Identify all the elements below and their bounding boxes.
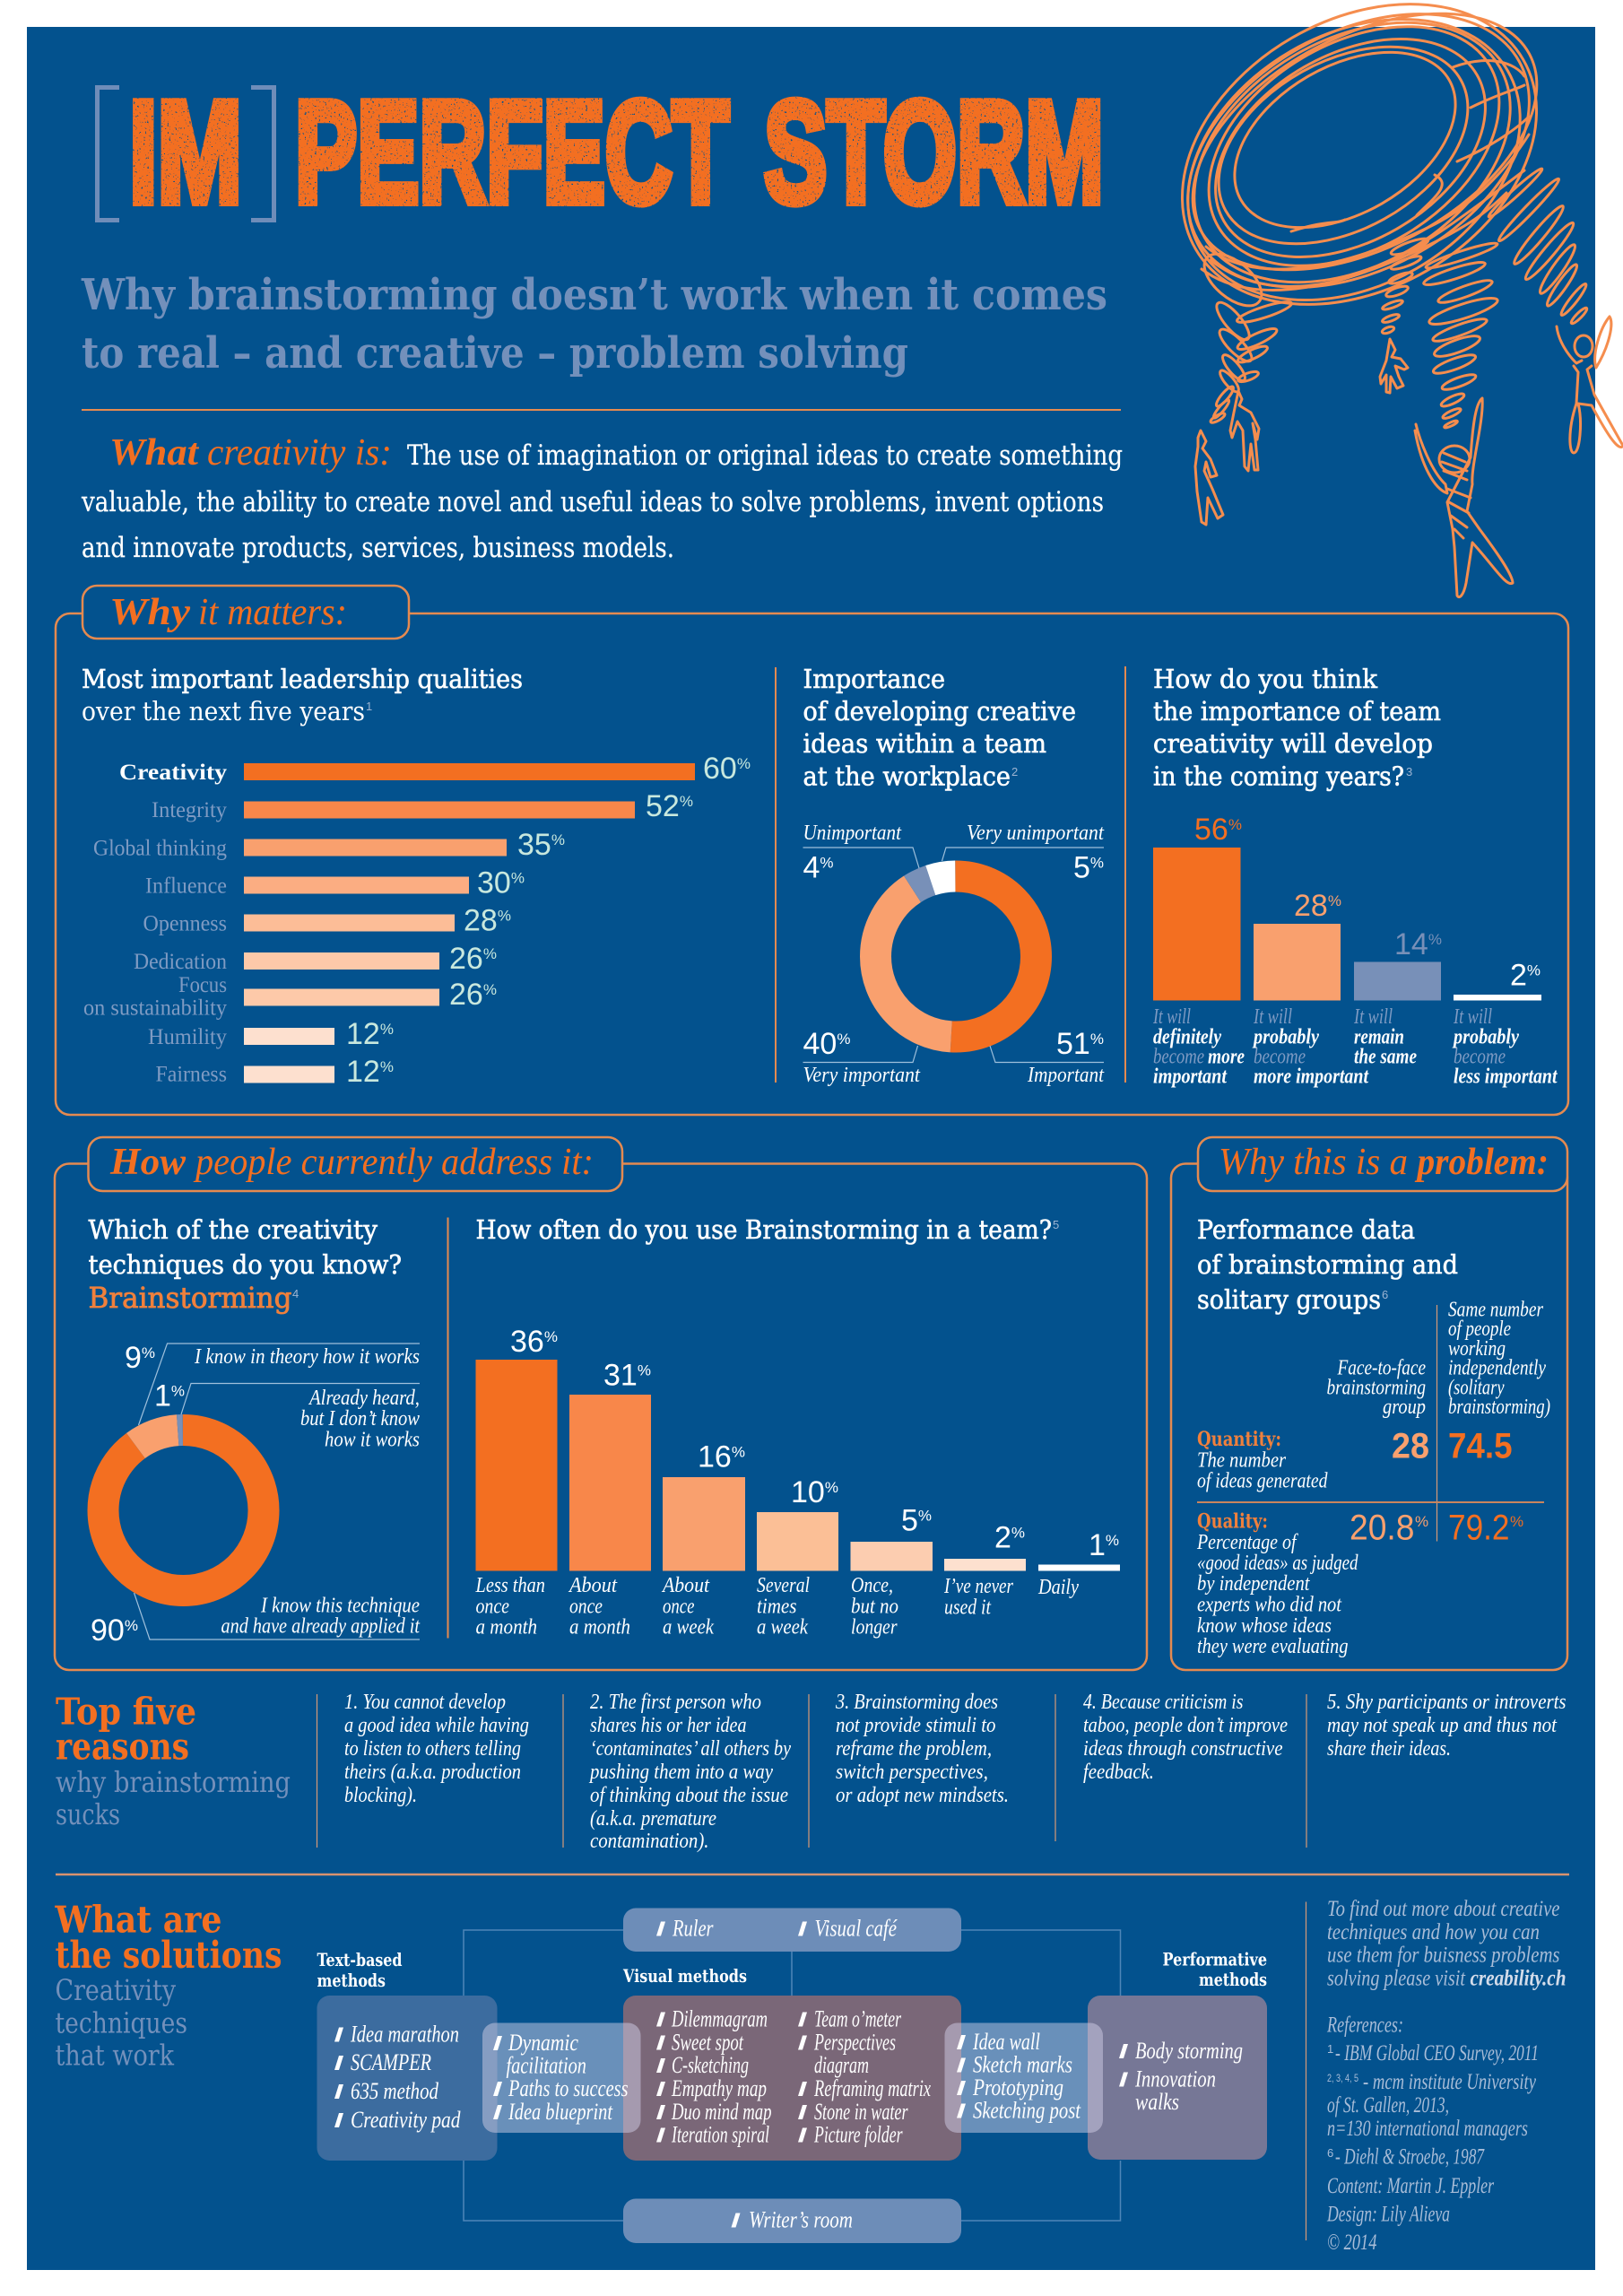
reason 5: share their ideas. bbox=[1327, 1737, 1451, 1761]
text block: more info and references: - mcm institute University bbox=[1363, 2070, 1537, 2094]
box: text-based methods: 635 method bbox=[351, 2078, 439, 2104]
bar chart: leadership qualities: Dedication bbox=[134, 950, 227, 974]
bar chart: leadership qualities: 12 bbox=[346, 1017, 380, 1051]
text block: more info and references: 6 bbox=[1327, 2146, 1333, 2160]
reason 2: contamination). bbox=[590, 1830, 708, 1853]
panel heading: why it matters: Why bbox=[109, 592, 190, 633]
heading: what are the solutions: that work bbox=[56, 2038, 175, 2072]
bar chart: leadership qualities: % bbox=[380, 1058, 394, 1075]
bar chart: future importance: % bbox=[1428, 931, 1442, 948]
panel: why this is a problem bbox=[1171, 1137, 1567, 1670]
bar chart: leadership qualities: Creativity bbox=[119, 761, 228, 785]
bar chart: leadership qualities: 52 bbox=[646, 789, 680, 823]
bar chart: leadership qualities: % bbox=[737, 755, 751, 772]
bar chart: future importance: % bbox=[1527, 961, 1541, 979]
box: visual top: Visual café bbox=[814, 1916, 898, 1941]
donut chart: importance: % bbox=[1090, 854, 1104, 872]
donut chart: brainstorming knowledge: I know this technique bbox=[260, 1595, 420, 1618]
bar chart: future importance: It will bbox=[1152, 1005, 1191, 1029]
donut chart: brainstorming knowledge: and have already applied it bbox=[221, 1614, 421, 1638]
heading: leadership qualities: Most important leadership qualities bbox=[82, 664, 523, 694]
bar chart: future importance: % bbox=[1328, 892, 1341, 909]
bar chart: brainstorming frequency: % bbox=[1106, 1532, 1119, 1549]
bar chart: brainstorming frequency: times bbox=[757, 1595, 796, 1618]
box: text-based methods: SCAMPER bbox=[351, 2049, 431, 2075]
bar chart: future importance: more important bbox=[1254, 1065, 1369, 1089]
list: visual methods items: Stone in water bbox=[814, 2099, 908, 2125]
diagram: creativity methods bbox=[317, 1909, 1267, 2243]
bar chart: leadership qualities: 60 bbox=[703, 752, 737, 786]
donut chart: importance: 40 bbox=[803, 1027, 837, 1061]
bar chart: leadership qualities: Openness bbox=[143, 911, 227, 936]
donut chart: importance: 4 bbox=[803, 850, 820, 884]
bar chart: brainstorming frequency: 1 bbox=[1089, 1528, 1106, 1562]
donut chart: importance: Very important bbox=[803, 1064, 921, 1087]
bar chart: brainstorming frequency: 10 bbox=[791, 1475, 825, 1509]
heading: team creativity development: 3 bbox=[1406, 765, 1412, 778]
heading: known creativity techniques: 4 bbox=[292, 1287, 299, 1300]
reason 4: feedback. bbox=[1083, 1761, 1154, 1784]
bar chart: leadership qualities: 28 bbox=[464, 904, 498, 938]
text block: more info and references: 2, 3, 4, 5 bbox=[1327, 2072, 1358, 2084]
bar chart: brainstorming frequency: a week bbox=[757, 1616, 808, 1639]
table: performance data: % bbox=[1510, 1513, 1523, 1530]
bar chart: brainstorming frequency: % bbox=[1011, 1525, 1025, 1541]
text block: more info and references: Design: Lily Alieva bbox=[1326, 2203, 1450, 2226]
box: writer's room: Writer’s room bbox=[749, 2206, 853, 2233]
reason 2: of thinking about the issue bbox=[590, 1784, 788, 1807]
bar chart: leadership qualities: 26 bbox=[449, 942, 483, 976]
heading: known creativity techniques: Brainstorming bbox=[88, 1281, 292, 1315]
reason 3: reframe the problem, bbox=[836, 1737, 992, 1761]
title bbox=[97, 72, 1104, 233]
text block: more info and references: - IBM Global CEO Survey, 2011 bbox=[1335, 2041, 1539, 2066]
heading: importance of developing creative ideas bbox=[803, 664, 1076, 791]
box: text-visual overlap: Paths to success bbox=[508, 2075, 628, 2101]
subtitle: to real – and creative – problem solving bbox=[82, 328, 908, 378]
bar chart: leadership qualities: Global thinking bbox=[93, 836, 227, 861]
intro: what creativity is: The use of imagination or original ideas to create something bbox=[407, 439, 1123, 472]
heading: team creativity development: the importance of team bbox=[1153, 696, 1441, 726]
reason 1: a good idea while having bbox=[344, 1714, 529, 1737]
bar chart: leadership qualities: on sustainability bbox=[83, 996, 227, 1021]
bar chart: brainstorming frequency: a month bbox=[475, 1616, 537, 1639]
heading: leadership qualities bbox=[82, 664, 523, 726]
list: visual methods items: Empathy map bbox=[671, 2075, 767, 2101]
reasons dividers bbox=[317, 1694, 1306, 1848]
panel heading: why it matters: it matters: bbox=[198, 592, 347, 633]
reason 4 bbox=[1083, 1691, 1288, 1784]
bar chart: future importance: % bbox=[1228, 816, 1242, 833]
bar chart: brainstorming frequency: a week bbox=[663, 1616, 714, 1639]
heading: performance data: solitary groups bbox=[1197, 1284, 1381, 1315]
bar chart: future importance: more bbox=[1208, 1046, 1245, 1069]
bar chart: future importance: 56 bbox=[1194, 813, 1228, 847]
bar chart: brainstorming frequency: 2 bbox=[994, 1521, 1011, 1555]
list: visual methods items: C-sketching bbox=[672, 2052, 749, 2078]
donut chart: importance: % bbox=[820, 854, 834, 872]
list: visual methods items: Duo mind map bbox=[671, 2099, 771, 2125]
bar chart: leadership qualities: 26 bbox=[449, 978, 483, 1012]
table: performance data bbox=[1196, 1299, 1550, 1658]
donut chart: importance: 5 bbox=[1073, 850, 1090, 884]
table: performance data: 74.5 bbox=[1448, 1426, 1512, 1465]
bar chart: leadership qualities: 30 bbox=[477, 866, 511, 900]
table: performance data: group bbox=[1383, 1396, 1426, 1419]
bar chart: leadership qualities: % bbox=[483, 945, 497, 962]
bar chart: leadership qualities: Focus bbox=[178, 973, 227, 997]
reason 2: pushing them into a way bbox=[588, 1761, 773, 1784]
box: text-visual overlap: Idea blueprint bbox=[508, 2099, 613, 2125]
bar chart: leadership qualities: 12 bbox=[346, 1055, 380, 1089]
box: visual top: Ruler bbox=[672, 1916, 714, 1941]
table: performance data: of ideas generated bbox=[1197, 1469, 1328, 1492]
panel heading: why this is a problem: Why this is a bbox=[1219, 1142, 1408, 1183]
heading: team creativity development: How do you think bbox=[1153, 664, 1377, 694]
bar chart: future importance: probably bbox=[1452, 1026, 1519, 1049]
bar chart: future importance: the same bbox=[1354, 1046, 1417, 1069]
donut chart: brainstorming knowledge: but I don’t know bbox=[300, 1407, 420, 1431]
text block: more info and references: solving please visit bbox=[1327, 1966, 1466, 1991]
bar chart: future importance: definitely bbox=[1153, 1026, 1221, 1049]
bar chart: future importance: 2 bbox=[1510, 958, 1527, 992]
reason 2: (a.k.a. premature bbox=[590, 1807, 716, 1831]
bar chart: brainstorming frequency: About bbox=[568, 1574, 618, 1597]
list: visual methods items: Perspectives bbox=[813, 2029, 896, 2056]
heading: team creativity development: creativity will develop bbox=[1153, 728, 1433, 759]
list: visual methods items: Dilemmagram bbox=[671, 2005, 768, 2032]
table: performance data: brainstorming bbox=[1327, 1376, 1426, 1399]
box: performative methods: Performative bbox=[1162, 1948, 1267, 1970]
heading: known creativity techniques bbox=[88, 1214, 402, 1315]
donut chart: importance: Unimportant bbox=[803, 822, 902, 845]
reason 4: taboo, people don’t improve bbox=[1083, 1714, 1288, 1737]
box: text-visual overlap: facilitation bbox=[506, 2052, 586, 2079]
table: performance data: they were evaluating bbox=[1197, 1635, 1349, 1658]
heading: top five reasons: why brainstorming bbox=[56, 1765, 291, 1799]
heading: team creativity development: in the coming years? bbox=[1153, 761, 1404, 791]
bar chart: brainstorming frequency bbox=[475, 1325, 1120, 1639]
icon: tornado scribble with people bbox=[1128, 0, 1623, 597]
donut chart: importance: 51 bbox=[1056, 1027, 1090, 1061]
bar chart: future importance: become bbox=[1153, 1046, 1204, 1069]
table: performance data: brainstorming) bbox=[1448, 1396, 1550, 1419]
heading: brainstorming frequency: How often do you use Brainstorming in a team? bbox=[475, 1214, 1052, 1245]
table: performance data: working bbox=[1448, 1337, 1506, 1361]
donut chart: brainstorming knowledge: I know in theory how it works bbox=[194, 1345, 420, 1369]
text block: more info and references: © 2014 bbox=[1327, 2231, 1377, 2255]
heading: performance data: of brainstorming and bbox=[1197, 1249, 1458, 1280]
heading: top five reasons: Top five bbox=[56, 1690, 196, 1733]
heading: brainstorming frequency: 5 bbox=[1053, 1218, 1059, 1231]
reason 4: ideas through constructive bbox=[1083, 1737, 1283, 1761]
bar chart: future importance: probably bbox=[1252, 1026, 1319, 1049]
reason 3 bbox=[835, 1691, 1009, 1807]
bar chart: leadership qualities: Influence bbox=[145, 874, 227, 899]
reason 3: or adopt new mindsets. bbox=[836, 1784, 1009, 1807]
donut chart: brainstorming knowledge bbox=[91, 1341, 421, 1648]
heading: top five reasons: reasons bbox=[56, 1726, 189, 1769]
table: performance data: Quality: bbox=[1197, 1510, 1268, 1534]
text block: more info and references: techniques and how you can bbox=[1327, 1920, 1540, 1944]
heading: known creativity techniques: Which of the creativity bbox=[88, 1214, 378, 1245]
donut chart: importance: % bbox=[837, 1031, 850, 1048]
bar chart: brainstorming frequency: 36 bbox=[510, 1325, 544, 1359]
text block: more info and references: creability.ch bbox=[1471, 1966, 1566, 1991]
box: text-based methods bbox=[317, 1949, 497, 2161]
heading: importance of developing creative ideas: 2 bbox=[1011, 765, 1018, 778]
box: text-visual overlap bbox=[482, 2023, 640, 2133]
panel heading: how people currently address it: people currently address it: bbox=[193, 1142, 594, 1183]
text block: more info and references: n=130 international managers bbox=[1327, 2117, 1528, 2141]
table: performance data: The number bbox=[1197, 1449, 1287, 1473]
reason 3: not provide stimuli to bbox=[836, 1714, 995, 1737]
heading: importance of developing creative ideas: at the workplace bbox=[803, 761, 1011, 791]
bar chart: future importance: important bbox=[1153, 1065, 1228, 1089]
heading: performance data: 6 bbox=[1382, 1288, 1388, 1301]
intro: what creativity is bbox=[81, 432, 1123, 564]
bar chart: brainstorming frequency: longer bbox=[851, 1616, 898, 1639]
bar chart: future importance: become bbox=[1254, 1046, 1306, 1069]
donut chart: brainstorming knowledge: 90 bbox=[91, 1613, 125, 1648]
reason 2: ‘contaminates’ all others by bbox=[590, 1737, 791, 1761]
subtitle: Why brainstorming doesn’t work when it comes bbox=[81, 270, 1107, 320]
bar chart: future importance: It will bbox=[1453, 1005, 1492, 1029]
reason 1: blocking). bbox=[344, 1784, 417, 1807]
heading: importance of developing creative ideas: of developing creative bbox=[803, 696, 1076, 726]
table: performance data: know whose ideas bbox=[1197, 1614, 1332, 1638]
panel heading: why this is a problem: problem: bbox=[1415, 1142, 1549, 1183]
bar chart: leadership qualities: Humility bbox=[148, 1025, 227, 1049]
bar chart: future importance: remain bbox=[1354, 1026, 1404, 1049]
box: writer's room bbox=[623, 2199, 961, 2243]
box: visual methods bbox=[622, 1965, 961, 2161]
reason 5 bbox=[1327, 1691, 1566, 1761]
bar chart: brainstorming frequency: % bbox=[918, 1507, 932, 1525]
reason 1: to listen to others telling bbox=[344, 1737, 521, 1761]
bar chart: leadership qualities: Integrity bbox=[152, 798, 227, 822]
bar chart: future importance: 14 bbox=[1394, 927, 1428, 961]
text block: more info and references: Content: Martin J. Eppler bbox=[1327, 2174, 1494, 2198]
bar chart: brainstorming frequency: % bbox=[732, 1444, 745, 1460]
table: performance data: Quantity: bbox=[1197, 1428, 1281, 1451]
reason 2 bbox=[588, 1691, 791, 1853]
list: visual methods items: Sweet spot bbox=[672, 2029, 744, 2056]
table: performance data: independently bbox=[1448, 1356, 1546, 1379]
text block: more info and references: References: bbox=[1326, 2013, 1403, 2038]
title: IM bbox=[129, 72, 242, 233]
bar chart: brainstorming frequency: I’ve never bbox=[943, 1575, 1014, 1598]
heading: what are the solutions: techniques bbox=[56, 2005, 187, 2039]
reason 5: may not speak up and thus not bbox=[1327, 1714, 1558, 1737]
title: STORM bbox=[764, 72, 1104, 233]
donut chart: brainstorming knowledge: Already heard, bbox=[308, 1387, 420, 1410]
box: performative methods: Body storming bbox=[1135, 2038, 1243, 2064]
intro: what creativity is: creativity is: bbox=[207, 432, 392, 474]
bar chart: brainstorming frequency: once bbox=[663, 1595, 695, 1618]
list: visual methods items bbox=[656, 2005, 931, 2147]
text block: more info and references: of St. Gallen, 2013, bbox=[1327, 2093, 1449, 2118]
donut chart: importance: % bbox=[1090, 1031, 1104, 1048]
text block: more info and references: use them for buisness problems bbox=[1327, 1943, 1560, 1968]
text block: more info and references: To find out more about creative bbox=[1327, 1897, 1560, 1921]
table: performance data: by independent bbox=[1197, 1572, 1311, 1596]
heading: leadership qualities: over the next five years bbox=[82, 696, 365, 726]
table: performance data: 28 bbox=[1392, 1426, 1429, 1465]
donut chart: importance: Important bbox=[1027, 1064, 1105, 1087]
box: text-based methods: methods bbox=[317, 1970, 386, 1991]
table: performance data: of people bbox=[1448, 1318, 1511, 1341]
bar chart: brainstorming frequency: once bbox=[569, 1595, 603, 1618]
intro: what creativity is: valuable, the ability to create novel and useful ideas to solve problems, invent options bbox=[81, 486, 1104, 518]
bar chart: leadership qualities: % bbox=[380, 1021, 394, 1038]
bar chart: future importance: become bbox=[1454, 1046, 1506, 1069]
bar chart: brainstorming frequency: % bbox=[825, 1479, 838, 1496]
bar chart: brainstorming frequency: but no bbox=[851, 1595, 898, 1618]
list: visual methods items: diagram bbox=[814, 2052, 869, 2078]
bar chart: brainstorming frequency: Less than bbox=[475, 1574, 545, 1597]
box: performative methods: methods bbox=[1199, 1969, 1267, 1990]
table: performance data: 79.2 bbox=[1448, 1509, 1510, 1548]
donut chart: brainstorming knowledge: % bbox=[171, 1383, 185, 1399]
list: visual methods items: Reframing matrix bbox=[813, 2075, 931, 2101]
bar chart: future importance: It will bbox=[1353, 1005, 1393, 1029]
list: visual methods items: Iteration spiral bbox=[671, 2122, 769, 2147]
text block: more info and references bbox=[1326, 1897, 1566, 2255]
bar chart: leadership qualities: % bbox=[551, 831, 565, 848]
reason 5: 5. Shy participants or introverts bbox=[1327, 1691, 1566, 1714]
box: visual-performative overlap bbox=[945, 2023, 1103, 2133]
bar chart: brainstorming frequency: Daily bbox=[1037, 1576, 1079, 1599]
heading: top five reasons: sucks bbox=[56, 1797, 120, 1831]
box: performative methods: walks bbox=[1135, 2089, 1179, 2115]
bar chart: leadership qualities: % bbox=[498, 908, 511, 924]
bar chart: brainstorming frequency: 5 bbox=[901, 1503, 918, 1537]
box: performative methods bbox=[1088, 1948, 1267, 2160]
heading: what are the solutions: What are bbox=[55, 1898, 221, 1941]
table: performance data: experts who did not bbox=[1197, 1593, 1342, 1616]
heading: what are the solutions bbox=[55, 1898, 282, 2072]
heading: what are the solutions: the solutions bbox=[56, 1934, 282, 1977]
list: visual methods items: Team o’meter bbox=[814, 2005, 902, 2032]
box: text-based methods: Idea marathon bbox=[350, 2022, 459, 2047]
text block: more info and references: - Diehl & Stroebe, 1987 bbox=[1335, 2145, 1485, 2169]
reason 4: 4. Because criticism is bbox=[1083, 1691, 1243, 1714]
bar chart: brainstorming frequency: Once, bbox=[851, 1574, 893, 1597]
panel heading: how people currently address it bbox=[88, 1137, 622, 1191]
panel heading: why it matters bbox=[82, 586, 409, 639]
bar chart: leadership qualities: Fairness bbox=[156, 1062, 227, 1087]
donut chart: importance: Very unimportant bbox=[967, 822, 1105, 845]
panel heading: how people currently address it: How bbox=[109, 1142, 187, 1183]
box: visual-performative overlap: Sketch marks bbox=[973, 2052, 1072, 2077]
box: text-visual overlap: Dynamic bbox=[508, 2030, 578, 2056]
panel heading: why this is a problem bbox=[1198, 1137, 1567, 1191]
panel: how people currently address it bbox=[55, 1137, 1147, 1670]
heading: known creativity techniques: techniques do you know? bbox=[88, 1249, 402, 1280]
box: visual-performative overlap: Idea wall bbox=[972, 2029, 1040, 2055]
bar chart: leadership qualities: % bbox=[483, 981, 497, 998]
heading: performance data: Performance data bbox=[1197, 1214, 1415, 1245]
table: performance data: % bbox=[1415, 1513, 1428, 1530]
heading: performance data bbox=[1197, 1214, 1458, 1315]
reason 1 bbox=[344, 1691, 529, 1807]
table: performance data: Face-to-face bbox=[1337, 1356, 1426, 1379]
reason 2: shares his or her idea bbox=[590, 1714, 746, 1737]
bar chart: future importance: 28 bbox=[1294, 889, 1328, 923]
bar chart: future importance: It will bbox=[1253, 1005, 1292, 1029]
bar chart: brainstorming frequency: used it bbox=[944, 1596, 992, 1620]
donut chart: brainstorming knowledge: 1 bbox=[154, 1379, 171, 1413]
donut chart: brainstorming knowledge: % bbox=[125, 1617, 138, 1634]
box: text-based methods: Text-based bbox=[317, 1949, 403, 1970]
reason 2: 2. The first person who bbox=[590, 1691, 761, 1714]
bar chart: brainstorming frequency: % bbox=[544, 1328, 558, 1345]
bar chart: brainstorming frequency: once bbox=[475, 1595, 509, 1618]
table: performance data: «good ideas» as judged bbox=[1197, 1552, 1358, 1575]
donut chart: brainstorming knowledge: how it works bbox=[325, 1428, 420, 1451]
heading: importance of developing creative ideas: Importance bbox=[803, 664, 945, 694]
text block: more info and references: 1 bbox=[1327, 2042, 1333, 2056]
bar chart: brainstorming frequency: 31 bbox=[603, 1358, 638, 1392]
bar chart: future importance bbox=[1152, 813, 1558, 1089]
donut chart: brainstorming knowledge: 9 bbox=[125, 1341, 142, 1375]
reason 1: theirs (a.k.a. production bbox=[344, 1761, 521, 1784]
bar chart: leadership qualities bbox=[83, 752, 751, 1089]
heading: what are the solutions: Creativity bbox=[56, 1973, 176, 2007]
table: performance data: 20.8 bbox=[1350, 1509, 1415, 1548]
donut chart: importance bbox=[803, 822, 1105, 1087]
bar chart: brainstorming frequency: 16 bbox=[698, 1440, 732, 1474]
intro: what creativity is: What bbox=[109, 432, 199, 474]
donut chart: brainstorming knowledge: % bbox=[142, 1344, 155, 1361]
panel: why it matters bbox=[56, 586, 1568, 1115]
list: visual methods items: Picture folder bbox=[813, 2122, 903, 2147]
box: text-based methods: Creativity pad bbox=[351, 2107, 461, 2133]
bar chart: leadership qualities: % bbox=[511, 870, 525, 886]
box: visual-performative overlap: Sketching post bbox=[973, 2097, 1081, 2124]
table: performance data: (solitary bbox=[1448, 1376, 1505, 1399]
bar chart: brainstorming frequency: % bbox=[638, 1361, 651, 1379]
heading: leadership qualities: 1 bbox=[366, 700, 372, 713]
reason 3: 3. Brainstorming does bbox=[835, 1691, 998, 1714]
reason 3: switch perspectives, bbox=[836, 1761, 988, 1784]
box: performative methods: Innovation bbox=[1134, 2066, 1216, 2092]
bar chart: leadership qualities: 35 bbox=[517, 828, 551, 862]
table: performance data: Same number bbox=[1448, 1299, 1544, 1322]
box: visual top bbox=[623, 1909, 961, 1952]
reason 1: 1. You cannot develop bbox=[344, 1691, 506, 1714]
table: performance data: Percentage of bbox=[1196, 1531, 1298, 1554]
bar chart: brainstorming frequency: About bbox=[661, 1574, 710, 1597]
box: visual-performative overlap: Prototyping bbox=[972, 2074, 1063, 2100]
title: PERFECT bbox=[295, 72, 729, 233]
intro: what creativity is: and innovate products, services, business models. bbox=[82, 532, 674, 564]
heading: top five reasons bbox=[56, 1690, 291, 1831]
bar chart: brainstorming frequency: Several bbox=[757, 1574, 810, 1597]
bar chart: future importance: less important bbox=[1454, 1065, 1558, 1089]
bar chart: leadership qualities: % bbox=[680, 793, 693, 810]
subtitle bbox=[81, 270, 1107, 378]
heading: team creativity development bbox=[1153, 664, 1441, 791]
box: visual methods: Visual methods bbox=[622, 1965, 747, 1987]
heading: importance of developing creative ideas: ideas within a team bbox=[803, 728, 1046, 759]
bar chart: brainstorming frequency: a month bbox=[569, 1616, 630, 1639]
